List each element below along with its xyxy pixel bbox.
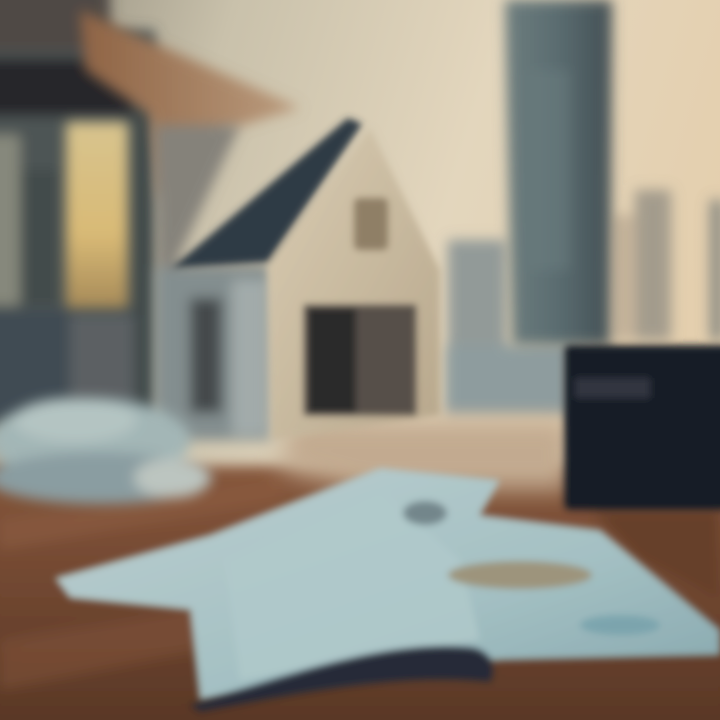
- house: grey side wall with door: [155, 125, 270, 440]
- house: large dark doorway: [304, 305, 416, 415]
- house: dark navy roof: [172, 118, 362, 268]
- building: dark structure on the left: [0, 0, 156, 430]
- ground: pale area in front of the house: [280, 420, 570, 490]
- skyline: distant buildings: [445, 190, 720, 415]
- table: wooden surface: [0, 466, 720, 720]
- roof: brown sloped roof: [80, 10, 300, 200]
- documents: dark booklet edge: [190, 647, 493, 712]
- skyline: tall glass tower: [505, 0, 612, 345]
- object: dark wallet box on the right: [564, 345, 720, 510]
- documents: open paper spread on the table: [55, 468, 720, 700]
- window: glowing yellow window: [66, 122, 128, 308]
- house: small attic window: [354, 198, 388, 250]
- house: cream front wall: [268, 128, 440, 440]
- object: pile of pale cushions: [0, 398, 212, 504]
